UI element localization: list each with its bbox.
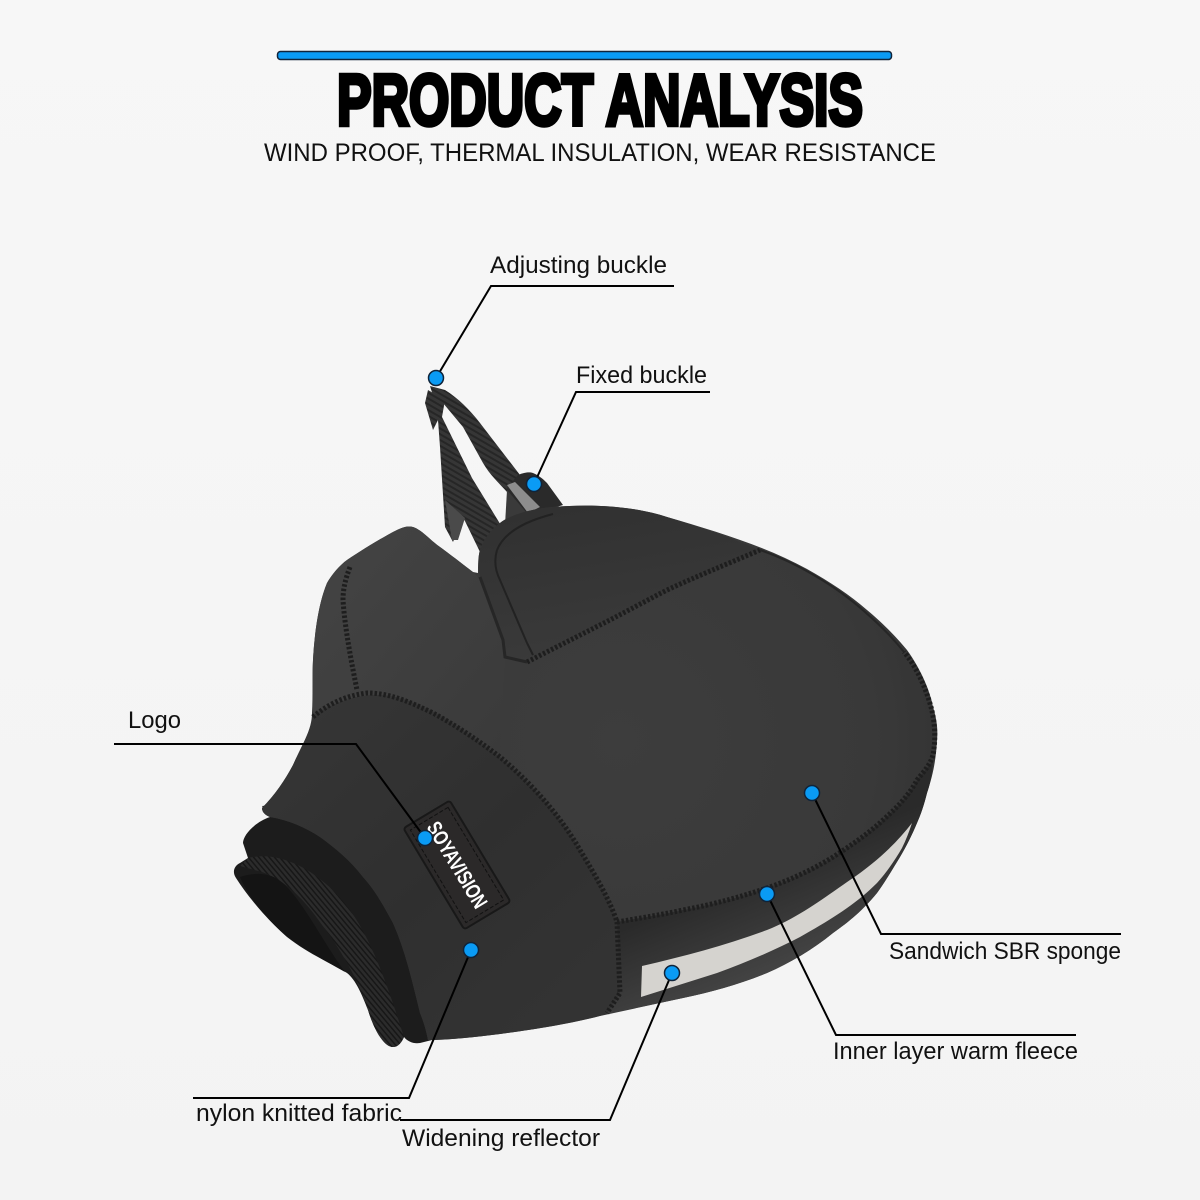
product: handlebar mitt bbox=[234, 386, 937, 1047]
title block bbox=[264, 52, 936, 167]
reflector bbox=[641, 823, 912, 997]
left panel bbox=[262, 695, 620, 1040]
callout: nylon knitted fabric bbox=[193, 942, 478, 1127]
flap inner edge bbox=[495, 550, 533, 655]
callout: nylon knitted fabric: nylon knitted fabric bbox=[196, 1100, 402, 1127]
callout: Fixed buckle: Fixed buckle bbox=[576, 362, 707, 389]
rim under hem bbox=[607, 760, 933, 1014]
title: PRODUCT ANALYSIS bbox=[337, 61, 863, 141]
callout: Logo: Logo bbox=[128, 707, 181, 734]
thumb section bbox=[313, 526, 505, 757]
top-right edge line bbox=[760, 550, 904, 652]
callout: Logo bbox=[114, 707, 432, 846]
callout: Widening reflector bbox=[400, 966, 680, 1152]
seams and stitching bbox=[313, 550, 935, 1013]
callout: Adjusting buckle bbox=[428, 252, 674, 386]
logo text: SOYAVISION bbox=[422, 818, 491, 913]
logo patch bbox=[403, 801, 511, 929]
strap: adjusting and fixed buckle bbox=[425, 386, 563, 552]
callout: Inner layer warm fleece bbox=[760, 886, 1078, 1065]
main body bbox=[262, 506, 937, 1040]
callout: Inner layer warm fleece: Inner layer warm fleece bbox=[833, 1038, 1078, 1065]
cuff bbox=[234, 800, 432, 1047]
subtitle: WIND PROOF, THERMAL INSULATION, WEAR RESISTANCE bbox=[264, 139, 936, 167]
callout: Widening reflector: Widening reflector bbox=[402, 1125, 600, 1152]
callout: Sandwich SBR sponge bbox=[804, 786, 1121, 965]
callout: Adjusting buckle: Adjusting buckle bbox=[490, 252, 667, 279]
ribbed lining bbox=[240, 856, 404, 1047]
callout: Sandwich SBR sponge: Sandwich SBR sponge bbox=[889, 938, 1121, 965]
cuff opening bbox=[240, 874, 345, 972]
accent bar bbox=[278, 52, 892, 60]
top flap bbox=[478, 506, 760, 662]
callout: Fixed buckle bbox=[526, 362, 710, 492]
